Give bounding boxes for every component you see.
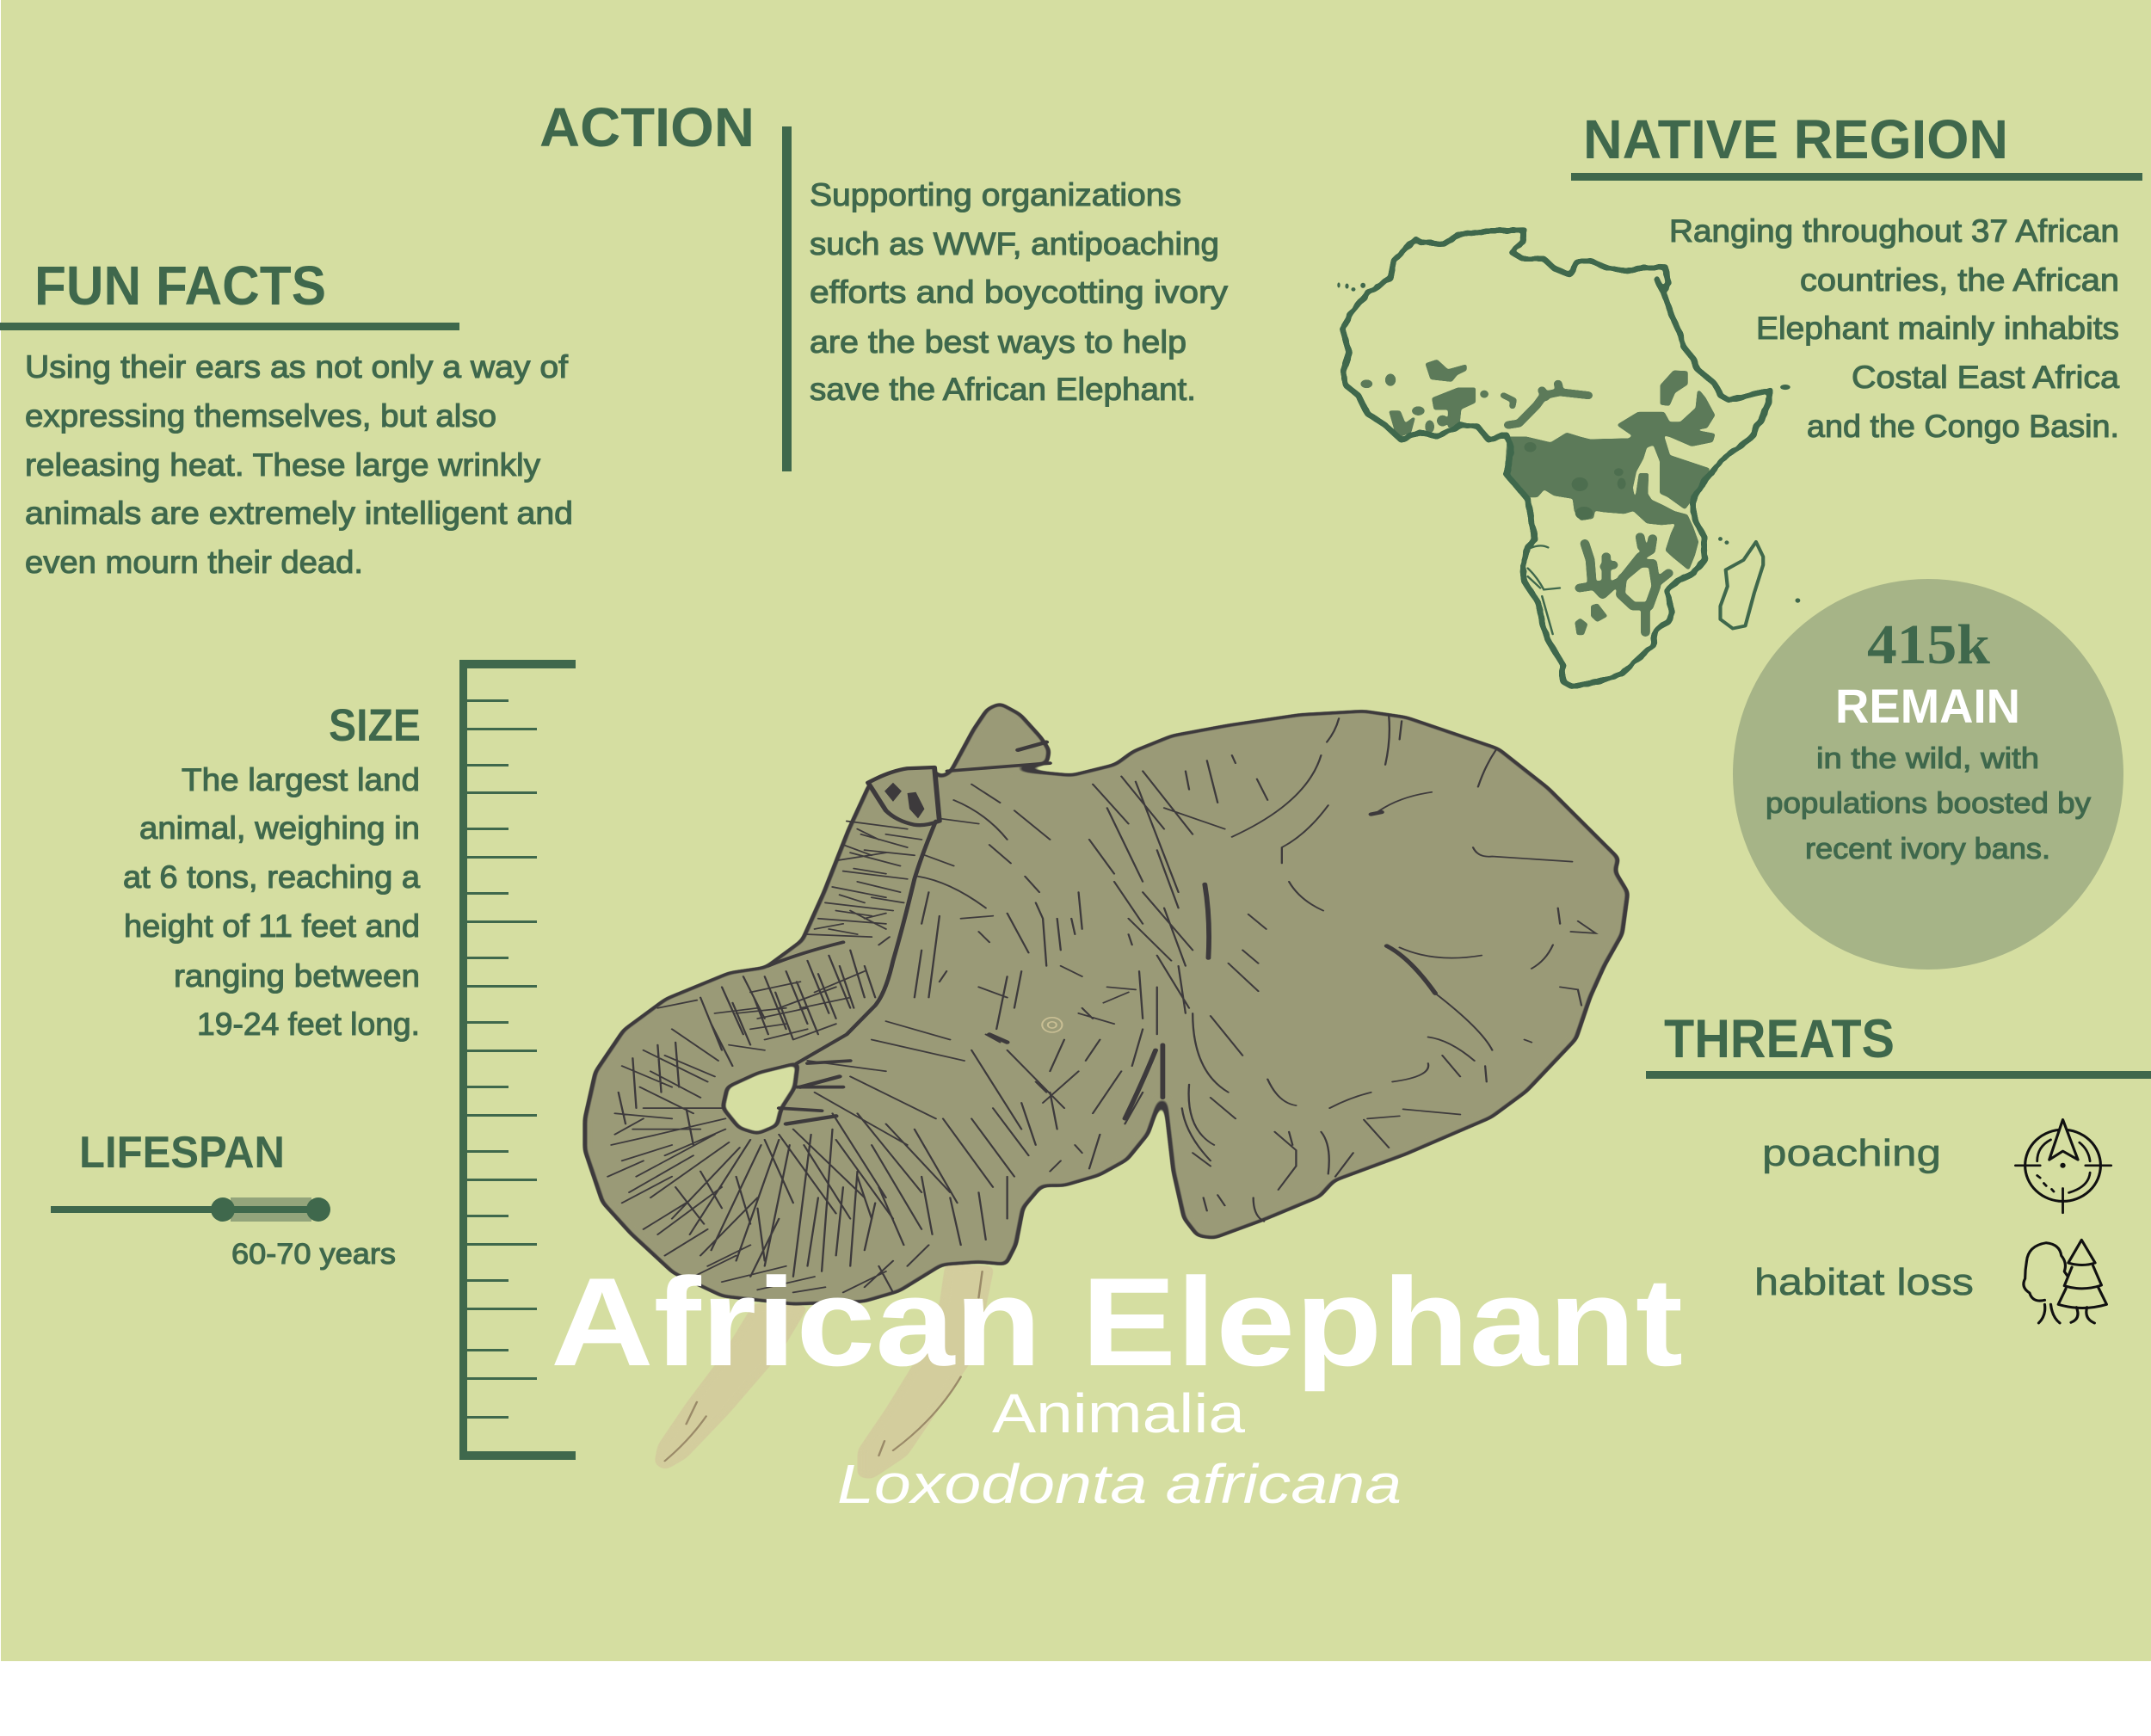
heading: native region: NATIVE REGION xyxy=(1583,108,2008,170)
text: fun facts body xyxy=(25,349,573,580)
title block xyxy=(551,1252,1683,1515)
label: habitat loss: habitat loss xyxy=(1754,1261,1974,1303)
thick creases xyxy=(786,742,1435,1123)
stat caption xyxy=(1766,742,2091,865)
trunk tip and nostrils xyxy=(868,767,940,825)
text: size body: height of 11 feet and xyxy=(124,908,420,944)
heading: size: SIZE xyxy=(329,700,421,751)
stat caption: in the wild, with xyxy=(1816,742,2039,775)
text: fun facts body: Using their ears as not only a way of xyxy=(25,349,569,385)
text: fun facts body: animals are extremely intelligent and xyxy=(25,496,573,531)
trunk curl wrinkles xyxy=(607,1000,928,1292)
icon: trees xyxy=(2024,1240,2106,1323)
text: action body: Supporting organizations xyxy=(810,177,1181,212)
stat caption: populations boosted by xyxy=(1766,787,2091,820)
ear wrinkles xyxy=(1182,716,1596,1222)
heading rule xyxy=(1571,173,2142,181)
text: size body: animal, weighing in xyxy=(139,810,420,846)
heading rule xyxy=(1646,1071,2151,1079)
upper trunk wrinkles xyxy=(807,821,921,945)
tusk grain xyxy=(665,1271,983,1461)
stat number: 415k xyxy=(1867,613,1990,676)
text: fun facts body: even mourn their dead. xyxy=(25,545,363,580)
panel: action xyxy=(539,96,1229,471)
map: darker range spots xyxy=(1524,442,1626,520)
mid trunk wrinkles xyxy=(700,950,875,1066)
text: native region body: Costal East Africa xyxy=(1852,360,2119,395)
heading: action: ACTION xyxy=(539,96,755,158)
text: native region body: countries, the African xyxy=(1800,262,2119,298)
label: poaching: poaching xyxy=(1762,1132,1941,1174)
text: fun facts body: releasing heat. These large wrinkly xyxy=(25,447,541,483)
vertical divider xyxy=(782,126,792,471)
icon: crosshair target xyxy=(2015,1120,2111,1213)
text: size body: 19-24 feet long. xyxy=(197,1007,420,1042)
text: action body: are the best ways to help xyxy=(810,324,1186,360)
map: continent outline xyxy=(1342,231,1771,686)
panel: native region xyxy=(1337,108,2142,686)
text: size body xyxy=(123,762,420,1042)
heading rule xyxy=(0,323,459,330)
text: action body: efforts and boycotting ivory xyxy=(810,274,1229,310)
panel: threats xyxy=(1646,1009,2151,1323)
text: action body xyxy=(810,177,1229,407)
map: coastal detail lines xyxy=(1528,545,1560,634)
text: native region body: Ranging throughout 37 African xyxy=(1669,213,2119,249)
illustration: elephant head xyxy=(582,702,1630,1480)
heading: threats: THREATS xyxy=(1664,1009,1895,1069)
wrinkles xyxy=(607,716,1596,1292)
text: action body: such as WWF, antipoaching xyxy=(810,226,1219,262)
panel: lifespan xyxy=(51,1128,396,1271)
lifespan value: 60-70 years xyxy=(231,1238,396,1271)
text: native region body: and the Congo Basin. xyxy=(1807,409,2119,444)
title: African Elephant xyxy=(551,1252,1683,1392)
panel: fun facts xyxy=(0,255,573,580)
text: action body: save the African Elephant. xyxy=(810,372,1196,407)
tusks xyxy=(654,1264,995,1480)
text: fun facts body: expressing themselves, but also xyxy=(25,398,496,434)
stat label: REMAIN xyxy=(1835,679,2020,733)
lifespan timeline xyxy=(51,1197,330,1222)
eye xyxy=(1042,1018,1062,1032)
height ruler xyxy=(459,660,576,1460)
stat circle: 415k remain xyxy=(1733,579,2123,970)
map: range areas xyxy=(1360,360,1713,634)
stat caption: recent ivory bans. xyxy=(1805,833,2050,865)
map: Madagascar xyxy=(1720,542,1763,629)
map: Africa with elephant range xyxy=(1337,231,1800,686)
text: size body: The largest land xyxy=(182,762,420,797)
subtitle: scientific name: Loxodonta africana xyxy=(837,1453,1402,1515)
elephant body xyxy=(582,702,1630,1306)
text: native region body: Elephant mainly inhabits xyxy=(1756,311,2119,346)
text: size body: ranging between xyxy=(174,958,420,994)
heading: lifespan: LIFESPAN xyxy=(79,1128,285,1178)
text: size body: at 6 tons, reaching a xyxy=(123,859,420,895)
subtitle: kingdom: Animalia xyxy=(992,1382,1245,1444)
heading: fun facts: FUN FACTS xyxy=(34,255,326,317)
map: islands xyxy=(1337,282,1800,603)
head fold lines xyxy=(768,763,1050,1111)
head wrinkles xyxy=(807,755,1267,1245)
text: native region body xyxy=(1669,213,2119,444)
panel: size xyxy=(123,660,576,1460)
trunk loop opening xyxy=(720,1061,800,1136)
